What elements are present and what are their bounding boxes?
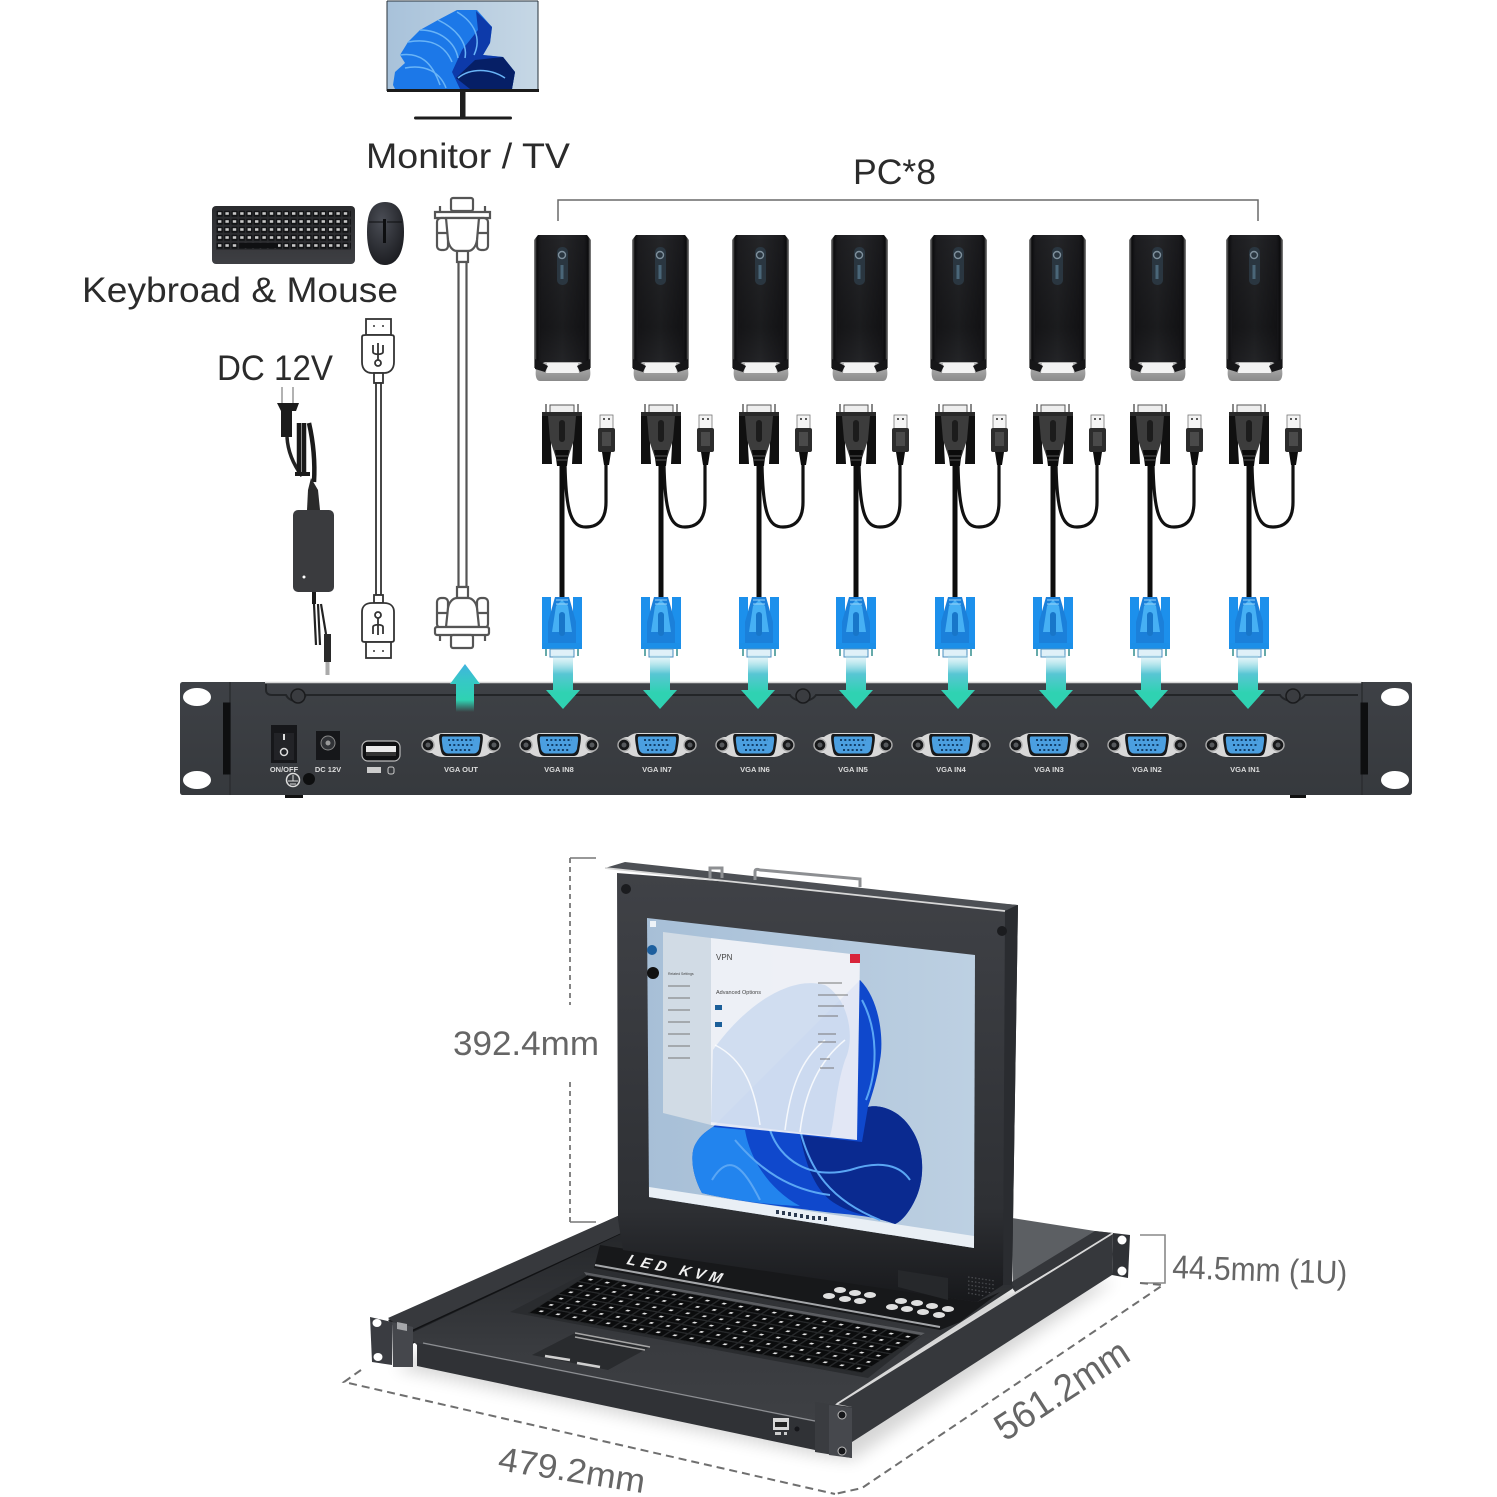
front USB <box>773 1418 800 1435</box>
cable 4 <box>836 404 909 657</box>
PCs row <box>534 235 1283 381</box>
arrow 7 <box>643 655 677 709</box>
taskbar <box>649 1187 974 1248</box>
PC 5 <box>930 235 987 381</box>
LED KVM logo: LED KVM <box>625 1252 725 1287</box>
label: DC 12V: DC 12V <box>217 349 334 388</box>
floor shadow <box>395 1240 1115 1460</box>
left rack ear <box>370 1317 413 1367</box>
arrows: VGA IN down <box>546 655 1265 709</box>
front panel <box>417 1343 815 1450</box>
PC 6 <box>1029 235 1086 381</box>
USB port <box>362 741 400 774</box>
settings window <box>711 938 860 1140</box>
PC 3 <box>732 235 789 381</box>
dimension: width 479.2mm <box>344 1370 835 1497</box>
right side face <box>837 1233 1113 1442</box>
port labels: VGA OUT <box>444 765 478 774</box>
screen <box>647 918 975 1248</box>
arrow 3 <box>1039 655 1073 709</box>
right rear rack ear <box>1112 1233 1130 1278</box>
port labels: VGA IN2 <box>1132 765 1162 774</box>
dimension: rack height 44.5mm (1U) <box>1140 1235 1348 1291</box>
window text: VPN <box>716 953 733 962</box>
VGA IN6 port <box>716 733 794 757</box>
arrow 2 <box>1134 655 1168 709</box>
feet <box>285 795 1306 798</box>
rear chassis plate <box>1012 1218 1113 1290</box>
top screws <box>291 689 1300 703</box>
VGA IN8 port <box>520 733 598 757</box>
VGA OUT port <box>422 733 500 757</box>
port labels: VGA IN3 <box>1034 765 1064 774</box>
monitor / TV icon <box>387 1 539 120</box>
VGA IN5 port <box>814 733 892 757</box>
cable 1 <box>542 404 615 657</box>
KVM cables row <box>542 404 1302 657</box>
rear panel <box>180 682 1412 798</box>
handle <box>710 868 860 887</box>
silver line <box>595 1265 940 1327</box>
bezel screws <box>621 884 631 894</box>
monitor lid <box>605 862 1018 1302</box>
port labels: VGA IN7 <box>642 765 672 774</box>
dimension: depth 561.2mm: 561.2mm <box>987 1332 1137 1450</box>
cable 8 <box>1229 404 1302 657</box>
icon: keyboard <box>212 206 355 264</box>
icon: power adapter <box>277 387 334 675</box>
arrow 4 <box>941 655 975 709</box>
PC 7 <box>1129 235 1186 381</box>
tray surface <box>407 1233 1015 1424</box>
cable 7 <box>1130 404 1203 657</box>
port labels <box>444 765 1260 774</box>
function buttons <box>823 1287 954 1318</box>
arrow: VGA OUT up <box>450 664 480 712</box>
label: PC*8: PC*8 <box>853 153 936 192</box>
control deck <box>594 1245 1000 1330</box>
window text <box>668 953 761 996</box>
window text: Related Settings <box>668 972 694 976</box>
dimension: depth 561.2mm <box>835 1283 1163 1494</box>
arrow 1 <box>1231 655 1265 709</box>
bracket over PCs <box>558 200 1258 221</box>
cable 3 <box>739 404 812 657</box>
cable 6 <box>1033 404 1106 657</box>
port labels: VGA IN5 <box>838 765 868 774</box>
PC 1 <box>534 235 591 381</box>
arrow 6 <box>741 655 775 709</box>
speaker grille <box>968 1277 995 1296</box>
silver edge <box>837 1233 1113 1404</box>
window text: Advanced Options <box>716 990 761 996</box>
dimension: height 392.4mm: 392.4mm <box>453 1025 599 1063</box>
window inner swirl <box>711 983 850 1136</box>
icon: VGA cable outline <box>435 198 490 648</box>
port labels: VGA IN4 <box>936 765 967 774</box>
power switch <box>271 725 297 763</box>
wallpaper flower <box>692 980 922 1224</box>
VGA IN3 port <box>1010 733 1088 757</box>
VGA IN1 port <box>1206 733 1284 757</box>
top bar <box>605 862 1017 911</box>
LCD KVM console <box>370 862 1130 1458</box>
flip tab <box>898 1270 948 1300</box>
PC 4 <box>831 235 888 381</box>
VGA IN4 port <box>912 733 990 757</box>
cable 5 <box>935 404 1008 657</box>
keyboard <box>510 1272 925 1378</box>
label: DC 12V: DC 12V <box>315 765 341 774</box>
rack slots <box>223 703 1368 774</box>
label: Keybroad & Mouse: Keybroad & Mouse <box>82 271 398 310</box>
arrow 5 <box>839 655 873 709</box>
ground symbol <box>286 773 315 786</box>
dimension: height 392.4mm <box>453 858 599 1222</box>
mounting holes <box>183 688 1409 789</box>
left rail <box>388 1215 623 1345</box>
desktop icons <box>650 921 656 927</box>
cable 2 <box>641 404 714 657</box>
label: ON/OFF: ON/OFF <box>270 765 299 774</box>
port labels: VGA IN8 <box>544 765 574 774</box>
PC 2 <box>632 235 689 381</box>
bright left lobes <box>692 1127 800 1206</box>
dimension: rack height 44.5mm (1U): 44.5mm (1U) <box>1172 1248 1348 1291</box>
DC jack <box>316 731 340 760</box>
settings sidebar <box>663 932 711 1125</box>
navy swirl <box>800 1106 922 1224</box>
PC 8 <box>1226 235 1283 381</box>
VGA IN2 port <box>1108 733 1186 757</box>
VGA IN7 port <box>618 733 696 757</box>
icon: mouse <box>367 202 404 265</box>
port labels: VGA IN1 <box>1230 765 1260 774</box>
icon: USB cable outline <box>362 319 394 658</box>
touchpad <box>532 1333 650 1370</box>
label: Monitor / TV: Monitor / TV <box>366 137 571 176</box>
arrow 8 <box>546 655 580 709</box>
right front rack ear <box>815 1402 852 1458</box>
port labels: VGA IN6 <box>740 765 770 774</box>
